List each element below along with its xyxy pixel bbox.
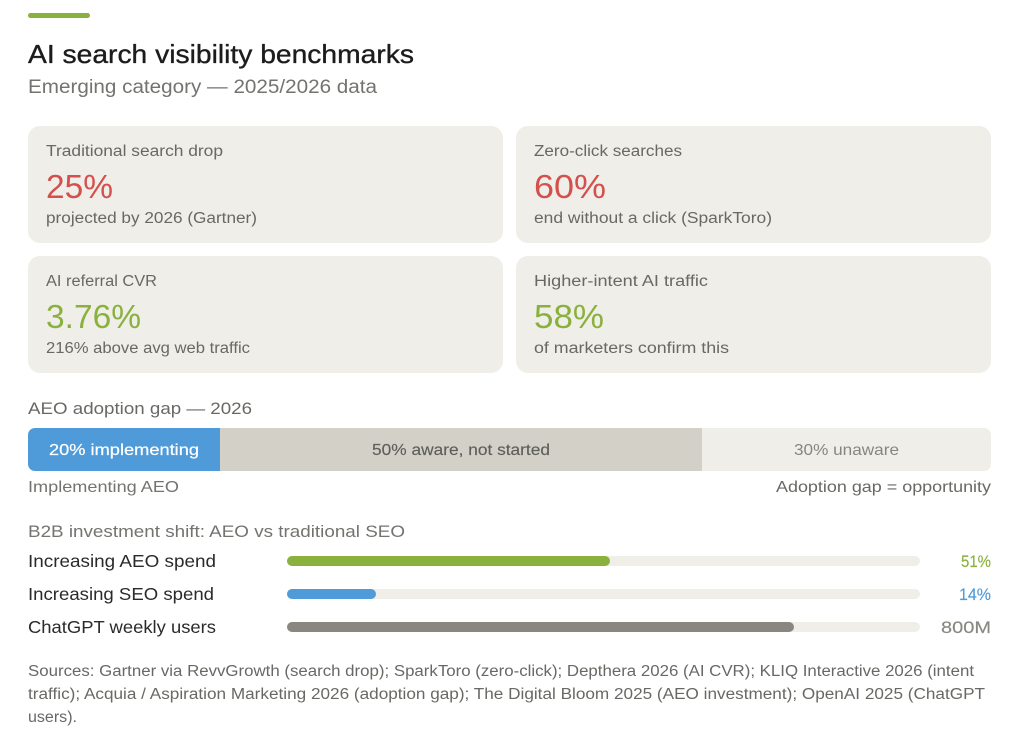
panel: traditional search drop xyxy=(28,126,503,243)
panel: AI referral CVR xyxy=(28,256,503,373)
panel: traditional search drop: 25% xyxy=(46,169,113,206)
sources text: traffic); Acquia / Aspiration Marketing 2026 (adoption gap); The Digital Bloom 2025 (AEO investment); OpenAI 2025 (ChatGPT xyxy=(28,686,986,703)
panel: zero-click searches xyxy=(516,126,991,243)
panel: higher-intent AI traffic: of marketers confirm this xyxy=(534,340,729,357)
sources text xyxy=(28,663,986,726)
bar row: increasing AEO spend: Increasing AEO spend xyxy=(28,551,216,571)
chart: adoption gap stacked bar: 20% implementing xyxy=(49,442,199,459)
title: AI search visibility benchmarks xyxy=(28,39,414,69)
heading: AEO adoption gap: AEO adoption gap — 2026 xyxy=(28,399,252,418)
panel: zero-click searches: 60% xyxy=(534,169,606,206)
heading: B2B investment shift: B2B investment shift: AEO vs traditional SEO xyxy=(28,522,405,541)
subtitle: Emerging category — 2025/2026 data xyxy=(28,77,377,98)
bar row: increasing AEO spend: 51% xyxy=(961,552,991,571)
sources text: Sources: Gartner via RevvGrowth (search drop); SparkToro (zero-click); Depthera 2026 (AI CVR); KLIQ Interactive 2026 (intent xyxy=(28,663,975,680)
panel: higher-intent AI traffic: Higher-intent AI traffic xyxy=(534,273,708,290)
caption: implementing AEO: Implementing AEO xyxy=(28,479,179,496)
bar row: increasing SEO spend xyxy=(28,584,991,604)
panel: higher-intent AI traffic: 58% xyxy=(534,299,604,336)
panel: AI referral CVR: 3.76% xyxy=(46,299,141,336)
bar row: increasing SEO spend: 14% xyxy=(959,585,991,604)
bar row: ChatGPT weekly users: 800M xyxy=(941,618,991,637)
panel: traditional search drop: Traditional search drop xyxy=(46,143,223,160)
caption: adoption gap opportunity: Adoption gap = opportunity xyxy=(776,479,991,496)
chart: adoption gap stacked bar xyxy=(28,428,991,471)
panel: traditional search drop: projected by 2026 (Gartner) xyxy=(46,210,257,227)
bar row: increasing SEO spend: Increasing SEO spend xyxy=(28,584,214,604)
panel: zero-click searches: Zero-click searches xyxy=(534,143,682,160)
panel: AI referral CVR: 216% above avg web traffic xyxy=(46,340,250,357)
panel: higher-intent AI traffic xyxy=(516,256,991,373)
panel: zero-click searches: end without a click (SparkToro) xyxy=(534,210,772,227)
bar row: ChatGPT weekly users xyxy=(28,617,991,637)
bar row: ChatGPT weekly users: ChatGPT weekly users xyxy=(28,617,216,637)
accent bar xyxy=(28,13,90,18)
chart: adoption gap stacked bar: 50% aware, not started xyxy=(372,442,550,459)
sources text: users). xyxy=(28,709,77,726)
chart: adoption gap stacked bar: 30% unaware xyxy=(794,442,899,459)
panel: AI referral CVR: AI referral CVR xyxy=(46,273,157,290)
bar row: increasing AEO spend xyxy=(28,551,991,571)
